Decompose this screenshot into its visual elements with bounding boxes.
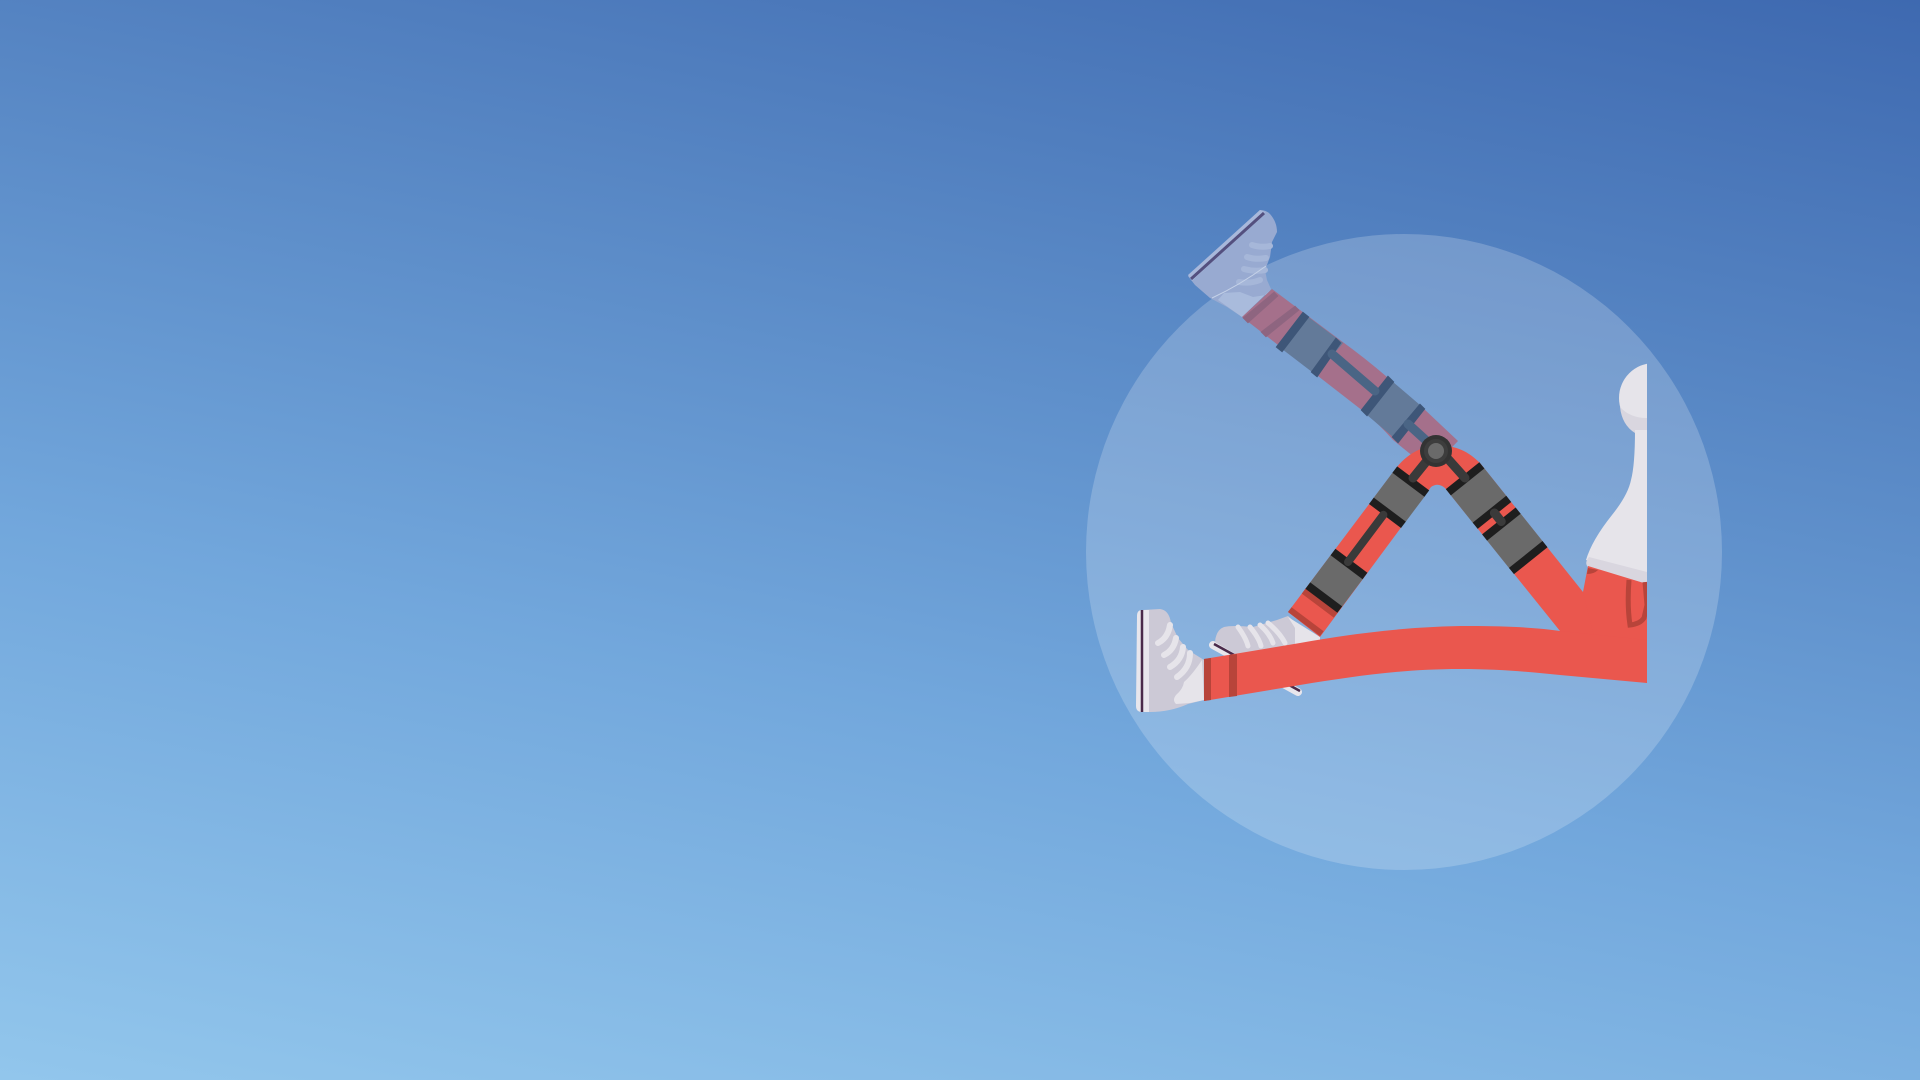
ghost raised leg	[1188, 210, 1458, 470]
thigh braces	[1446, 462, 1548, 574]
head	[1619, 364, 1647, 433]
straight leg	[1204, 626, 1647, 701]
ghost thigh and shin fabric	[1242, 289, 1458, 470]
shirt shadow	[1587, 568, 1598, 574]
back shoe	[1213, 616, 1320, 692]
pelvis	[1583, 566, 1647, 683]
illustration: seated figure swinging legs	[1086, 210, 1722, 870]
trouser cuff stripes	[1204, 654, 1237, 701]
translucent circle backdrop	[1086, 234, 1722, 870]
front shoe	[1136, 609, 1204, 712]
pocket	[1628, 580, 1647, 625]
knee joint	[1413, 435, 1465, 478]
ghost shoe	[1188, 210, 1277, 317]
shirt	[1586, 430, 1647, 580]
shirt hem	[1586, 557, 1647, 584]
shin braces	[1288, 466, 1429, 636]
figure torso and head	[1583, 364, 1647, 683]
bent leg	[1288, 435, 1600, 660]
ghost straps	[1244, 293, 1430, 444]
bent leg fabric	[1288, 445, 1600, 660]
